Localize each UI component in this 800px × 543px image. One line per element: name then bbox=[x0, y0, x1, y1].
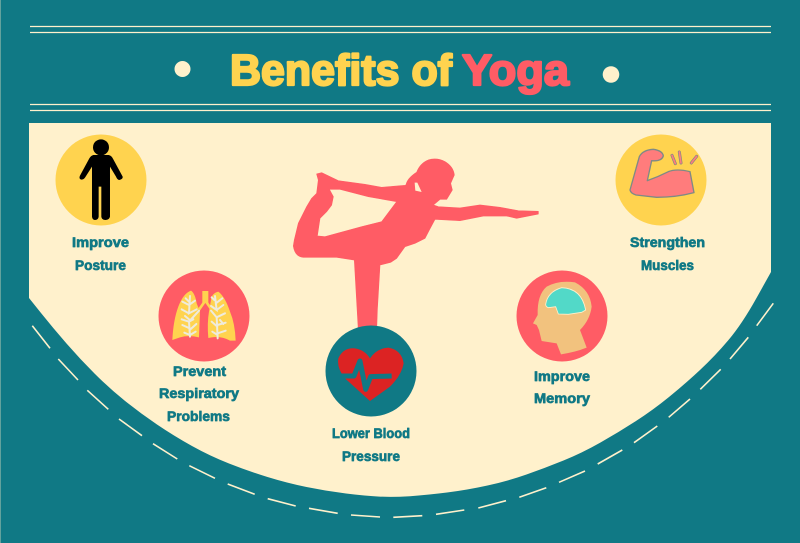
icon: heart circle bbox=[326, 326, 416, 416]
header rules bbox=[30, 26, 771, 110]
cream semicircular panel bbox=[29, 123, 771, 497]
label: improve memory bbox=[534, 368, 590, 406]
label: strengthen muscles bbox=[630, 234, 705, 273]
title: Benefits of bbox=[230, 46, 452, 95]
label: improve memory: Memory bbox=[534, 390, 590, 406]
title dot left bbox=[174, 61, 190, 77]
label: improve posture: Posture bbox=[75, 257, 126, 273]
label: prevent respiratory problems: Problems bbox=[167, 408, 230, 424]
label: prevent respiratory problems bbox=[159, 363, 239, 424]
label: lower blood pressure: Lower Blood bbox=[332, 425, 410, 441]
label: lower blood pressure: Pressure bbox=[342, 448, 400, 464]
label: strengthen muscles: Strengthen bbox=[630, 234, 705, 250]
label: lower blood pressure bbox=[332, 425, 410, 464]
dashed curve border bbox=[32, 303, 773, 517]
icon: posture circle with person bbox=[56, 134, 146, 226]
label: strengthen muscles: Muscles bbox=[641, 257, 694, 273]
icon: lungs circle bbox=[158, 270, 250, 362]
label: improve posture bbox=[72, 234, 129, 273]
label: prevent respiratory problems: Respiratory bbox=[159, 385, 239, 401]
label: improve memory: Improve bbox=[534, 368, 590, 384]
title bbox=[230, 46, 570, 95]
icon: brain circle bbox=[516, 270, 608, 362]
title dot right bbox=[603, 66, 619, 83]
label: prevent respiratory problems: Prevent bbox=[173, 363, 226, 379]
label: improve posture: Improve bbox=[72, 234, 129, 250]
yoga silhouette bbox=[293, 159, 538, 330]
icon: muscle circle bbox=[616, 134, 706, 226]
title: Yoga bbox=[462, 46, 570, 95]
